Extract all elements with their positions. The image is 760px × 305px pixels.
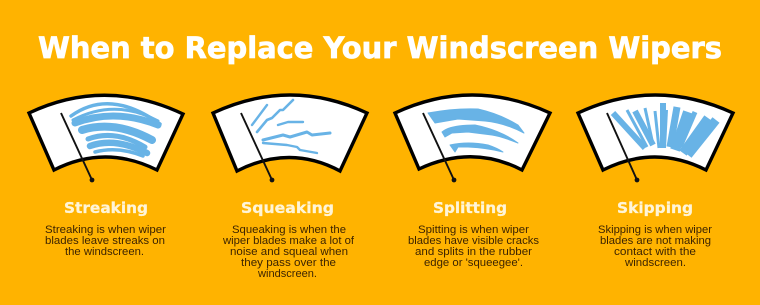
- description: windscreen.: [257, 268, 317, 280]
- squeak marks: [252, 100, 330, 153]
- heading: Skipping: [617, 199, 693, 217]
- description: the windscreen.: [65, 246, 144, 258]
- panel: streaking: [29, 95, 183, 258]
- wiper arm: [423, 113, 454, 180]
- wiper arm: [61, 113, 92, 180]
- description: [45, 224, 166, 258]
- title: When to Replace Your Windscreen Wipers: [38, 31, 722, 65]
- streak marks: [71, 104, 160, 156]
- description: [222, 224, 355, 280]
- description: and splits in the rubber: [415, 246, 532, 258]
- heading: Splitting: [433, 199, 507, 217]
- description: noise and squeal when: [230, 246, 348, 258]
- panel: squeaking: [213, 95, 367, 280]
- panel: skipping: [578, 95, 733, 269]
- windscreen: skipping: [578, 95, 733, 170]
- description: edge or 'squeegee'.: [424, 257, 523, 269]
- windscreen: splitting: [395, 95, 550, 170]
- description: they pass over the: [241, 257, 336, 269]
- description: [598, 224, 712, 269]
- heading: Streaking: [64, 199, 148, 217]
- description: Skipping is when wiper: [598, 224, 712, 236]
- description: blades are not making: [600, 235, 711, 247]
- wiper arm: [241, 113, 272, 180]
- description: windscreen.: [624, 257, 686, 269]
- description: wiper blades make a lot of: [222, 235, 355, 247]
- heading: Squeaking: [241, 199, 334, 217]
- description: contact with the: [614, 246, 696, 258]
- description: Squeaking is when the: [232, 224, 346, 236]
- description: blades have visible cracks: [408, 235, 539, 247]
- split marks: [428, 109, 524, 152]
- wiper arm: [607, 113, 637, 180]
- description: [408, 224, 539, 269]
- panel: splitting: [395, 95, 550, 269]
- description: blades leave streaks on: [45, 235, 165, 247]
- windscreen: squeaking: [213, 95, 367, 171]
- skip marks: [613, 103, 716, 155]
- windscreen: streaking: [29, 95, 183, 170]
- description: Streaking is when wiper: [45, 224, 166, 236]
- description: Spitting is when wiper: [418, 224, 529, 236]
